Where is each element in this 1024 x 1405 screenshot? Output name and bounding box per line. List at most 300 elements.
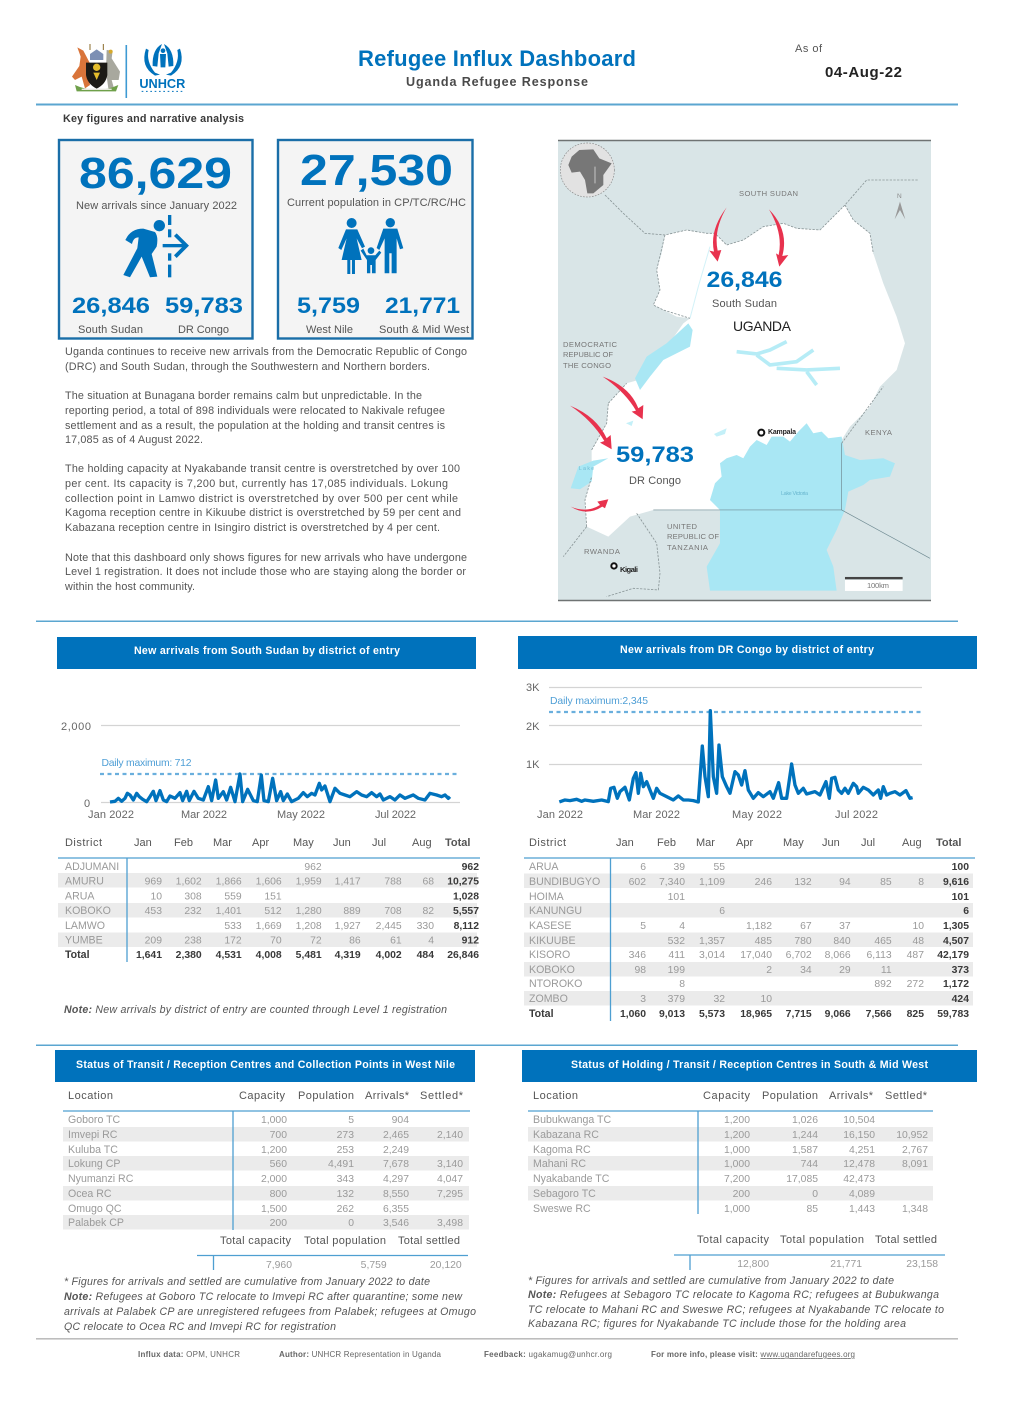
row: Hoima: 101: [668, 892, 685, 903]
row: Arua: 559: [224, 892, 242, 902]
row: Nyumanzi RC: Nyumanzi RC: [68, 1173, 134, 1185]
y axis labels: 3K: [526, 682, 540, 694]
row: Amuru: AMURU: [65, 876, 104, 888]
note: West Nile: [64, 1276, 476, 1333]
logo divider: [126, 45, 127, 98]
row: Kikuube: 532: [668, 936, 685, 947]
row: Lokung CP: 3,140: [437, 1159, 463, 1170]
row: Yumbe: 70: [270, 936, 282, 946]
y axis labels: 1K: [526, 759, 540, 771]
map label: Congo country: REPUBLIC OF: [563, 350, 613, 359]
row: Arua: [65, 890, 479, 902]
narrative text: Note that this dashboard only shows figures for new arrivals who have undergone: [65, 552, 467, 564]
row: Lamwo: LAMWO: [65, 920, 105, 932]
row: Sweswe RC: 1,348: [902, 1204, 928, 1215]
row: Kikuube: 48: [912, 936, 924, 947]
table: South Sudan arrivals by district: [58, 837, 480, 962]
row: Bundibugyo: 94: [839, 877, 851, 888]
as of label: As of: [795, 43, 823, 55]
table header: Arrivals*: [829, 1090, 874, 1102]
table header: Capacity: [239, 1090, 286, 1102]
row: Hoima: 101: [952, 892, 969, 903]
map label: north: N: [897, 193, 902, 200]
map label: Congo country: [563, 340, 618, 370]
row: Adjumani: [65, 861, 479, 873]
line chart: South Sudan daily arrivals: [61, 721, 460, 821]
row: total: 1,060: [620, 1009, 646, 1020]
map label: South Sudan country: SOUTH SUDAN: [739, 189, 798, 198]
row: Koboko: 11: [881, 965, 892, 976]
map label: Tanzania: REPUBLIC OF: [667, 532, 719, 541]
panel heading: DR Congo arrivals: [518, 636, 977, 669]
data line: [559, 711, 913, 802]
map: Uganda land area: [585, 205, 905, 537]
row: Koboko: 373: [952, 965, 969, 976]
row: Kabazana RC: 1,244: [792, 1130, 818, 1141]
table header: [529, 837, 961, 849]
row: Arua: 39: [673, 862, 685, 873]
row: Arua: [529, 861, 969, 873]
narrative text: The situation at Bunagana border remains calm but unpredictable. In the: [65, 390, 422, 402]
row: Imvepi RC: 2,465: [383, 1130, 409, 1141]
row: total: 4,319: [335, 950, 361, 961]
row: Koboko: 199: [668, 965, 685, 976]
row: Nyakabande TC: Nyakabande TC: [533, 1173, 610, 1185]
row: total: 4,531: [216, 950, 242, 961]
note: South and Mid West: TC relocate to Mahani RC and Sweswe RC; refugees at Nyakabande TC relocate to: [528, 1304, 944, 1316]
row: Palabek CP: [68, 1217, 463, 1229]
totals: West Nile: 7,960: [266, 1260, 292, 1271]
row: Sebagoro TC: 0: [812, 1189, 818, 1200]
row: Zombo: [529, 993, 969, 1005]
row: Sebagoro TC: 200: [733, 1189, 750, 1200]
totals: South and Mid West: [674, 1234, 945, 1270]
panel heading: West Nile centres: [55, 1050, 475, 1082]
row: Yumbe: YUMBE: [65, 934, 103, 946]
row: Kabazana RC: [533, 1129, 928, 1141]
row: Lamwo: [65, 920, 479, 932]
map label: Kampala: Kampala: [768, 429, 796, 436]
row: Kisoro: KISORO: [529, 949, 570, 961]
row: Yumbe: [65, 934, 479, 946]
note: South Sudan table: Note: New arrivals by district of entry are counted through Level 1 registration: [64, 1004, 447, 1016]
narrative text: collection point in Lamwo district is overstretched by over 500 per cent while: [65, 493, 458, 505]
row: Nyumanzi RC: 2,000: [261, 1174, 287, 1185]
narrative text: within the host community.: [64, 581, 195, 593]
row: Kisoro: 6,702: [786, 950, 812, 961]
row: Kikuube: 465: [874, 936, 892, 947]
date: 04-Aug-22: [825, 64, 902, 81]
table header: [65, 837, 470, 849]
totals: South and Mid West: Total settled: [875, 1234, 937, 1246]
row: Amuru: 10,275: [447, 876, 479, 888]
figure: DR Congo: 59,783: [165, 293, 243, 318]
totals: South and Mid West: 21,771: [830, 1259, 862, 1270]
table header: May: [293, 837, 314, 849]
footer: [138, 1350, 855, 1359]
y axis labels: 2,000: [61, 721, 91, 733]
row: Sebagoro TC: 4,089: [849, 1189, 875, 1200]
table header: Population: [762, 1090, 818, 1102]
narrative text: Kagoma reception centre in Kikuube district is overstretched by 59 per cent and: [65, 507, 461, 519]
row: Koboko: KOBOKO: [529, 964, 575, 976]
row: total: 59,783: [937, 1009, 969, 1020]
row: Mahani RC: 744: [801, 1159, 818, 1170]
row: Kasese: 10: [912, 921, 924, 932]
panel heading: South Sudan arrivals: New arrivals from South Sudan by district of entry: [134, 645, 400, 657]
row: Amuru: 68: [422, 876, 434, 888]
panel heading: West Nile centres: Status of Transit / Reception Centres and Collection Points in West Nile: [76, 1059, 455, 1071]
row: Mahani RC: 8,091: [902, 1159, 928, 1170]
row: Koboko: 232: [184, 906, 202, 917]
x axis labels: May 2022: [277, 809, 325, 821]
row: Ntoroko: [529, 978, 969, 990]
totals: South and Mid West: 12,800: [737, 1259, 769, 1270]
label: South Sudan: South Sudan: [78, 324, 143, 336]
panel heading: DR Congo arrivals: New arrivals from DR Congo by district of entry: [620, 644, 874, 656]
row: Lokung CP: 560: [270, 1159, 287, 1170]
row: Mahani RC: 12,478: [843, 1159, 875, 1170]
row: Mahani RC: Mahani RC: [533, 1158, 586, 1170]
row: Lamwo: 1,927: [335, 921, 361, 932]
map: globe inset: [560, 143, 614, 197]
row: Kasese: [529, 920, 969, 932]
row: Kikuube: 4,507: [943, 936, 969, 947]
totals: West Nile: 20,120: [430, 1260, 462, 1271]
map label: Tanzania: UNITED: [667, 522, 698, 531]
row: Yumbe: 172: [224, 936, 242, 946]
row: Lokung CP: Lokung CP: [68, 1158, 120, 1170]
row: Goboro TC: 904: [392, 1115, 409, 1126]
table header: Total: [936, 837, 961, 849]
row: Amuru: 1,959: [296, 876, 322, 888]
row: Amuru: 788: [384, 876, 402, 888]
table header: Population: [298, 1090, 354, 1102]
row: Kagoma RC: 1,587: [792, 1145, 818, 1156]
row: Yumbe: 209: [145, 936, 162, 946]
row: Zombo: 379: [668, 994, 685, 1005]
row: Ocea RC: [68, 1188, 463, 1200]
row: Nyumanzi RC: 4,047: [437, 1174, 463, 1185]
row: Kanungu: [529, 905, 969, 917]
row: Koboko: [65, 905, 479, 917]
row: Ntoroko: 1,172: [943, 979, 969, 990]
big figure: current population: 27,530: [300, 147, 453, 195]
row: Yumbe: 4: [428, 936, 434, 946]
row: Nyakabande TC: 7,200: [724, 1174, 750, 1185]
x axis labels: Mar 2022: [181, 809, 227, 821]
logo: UNHCR emblem: UNHCR: [139, 76, 186, 91]
row: Omugo QC: Omugo QC: [68, 1203, 122, 1215]
note: West Nile: QC relocate to Ocea RC and Imvepi RC for registration: [64, 1321, 336, 1333]
row: Kisoro: 3,014: [699, 950, 725, 961]
row: Kanungu: 6: [719, 906, 725, 917]
row: Koboko: 453: [145, 906, 162, 917]
row: Kuluba TC: Kuluba TC: [68, 1144, 118, 1156]
row: Imvepi RC: 700: [270, 1130, 287, 1141]
row: Yumbe: 912: [462, 936, 479, 946]
row: total: 825: [907, 1009, 924, 1020]
table header: District: [529, 837, 566, 849]
row: Omugo QC: 1,500: [261, 1204, 287, 1215]
title: Refugee Influx Dashboard: [358, 46, 636, 71]
totals: West Nile: [197, 1235, 468, 1271]
panel heading: South and Mid West centres: Status of Holding / Transit / Reception Centres in South & Mid West: [571, 1059, 928, 1071]
map label: Tanzania: [667, 522, 719, 552]
row: Kasese: 1,182: [746, 921, 772, 932]
map figure: South Sudan: 26,846: [706, 267, 782, 292]
row: Sebagoro TC: [533, 1188, 875, 1200]
map: Lake Albert: [635, 323, 693, 390]
row: Hoima: [529, 891, 969, 903]
row: Mahani RC: [533, 1158, 928, 1170]
row: Arua: 1,028: [453, 892, 479, 902]
logo: UNHCR emblem: [139, 44, 186, 91]
row: Goboro TC: [68, 1114, 409, 1126]
x axis labels: [537, 809, 878, 821]
row: Ocea RC: 7,295: [437, 1189, 463, 1200]
table header: Aug: [902, 837, 922, 849]
note: South and Mid West: [528, 1275, 944, 1330]
x axis labels: Jan 2022: [537, 809, 583, 821]
row: Palabek CP: Palabek CP: [68, 1217, 124, 1229]
table header: Total: [445, 837, 470, 849]
daily maximum label: Daily maximum: 712: [102, 758, 192, 769]
note: West Nile: arrivals at Palabek CP are unregistered refugees from Palabek; refugees at Omugo: [64, 1306, 476, 1318]
map caption: South Sudan: South Sudan: [712, 298, 777, 310]
logo: Uganda coat of arms: [72, 44, 120, 91]
row: Koboko: 708: [384, 906, 402, 917]
row: Nyakabande TC: [533, 1173, 875, 1185]
map label: Rwanda: RWANDA: [584, 547, 621, 556]
row: total: 5,573: [699, 1009, 725, 1020]
row: Bubukwanga TC: Bubukwanga TC: [533, 1114, 611, 1126]
footer: author: Author: UNHCR Representation in Uganda: [279, 1350, 442, 1359]
note: South and Mid West: Note: Refugees at Sebagoro TC relocate to Kagoma RC; refugees at Bubukwanga: [528, 1289, 939, 1301]
footer: website: For more info, please visit: www.ugandarefugees.org: [651, 1350, 855, 1359]
subtitle: Uganda Refugee Response: [406, 75, 588, 89]
row: Zombo: 424: [952, 994, 969, 1005]
label: West Nile: West Nile: [306, 324, 353, 336]
totals: West Nile: 5,759: [361, 1260, 387, 1271]
table header: Mar: [213, 837, 232, 849]
totals: South and Mid West: 23,158: [906, 1259, 938, 1270]
row: total: 4,008: [256, 950, 282, 961]
map: Kigali marker: [611, 563, 617, 569]
icon: family: [338, 218, 403, 274]
row: Sebagoro TC: Sebagoro TC: [533, 1188, 596, 1200]
row: total: 9,066: [825, 1009, 851, 1020]
table header: Apr: [252, 837, 269, 849]
table header: [533, 1090, 928, 1102]
map label: Kenya: KENYA: [865, 428, 893, 437]
row: Lamwo: 533: [224, 921, 242, 932]
row: Ocea RC: 132: [337, 1189, 354, 1200]
footer: feedback: Feedback: ugakamug@unhcr.org: [484, 1350, 612, 1359]
row: Sweswe RC: Sweswe RC: [533, 1203, 591, 1215]
row: Bubukwanga TC: 1,200: [724, 1115, 750, 1126]
row: Nyakabande TC: 17,085: [786, 1174, 818, 1185]
data line: [110, 774, 450, 802]
narrative text: (DRC) and South Sudan, through the Southwestern and Northern borders.: [65, 361, 430, 373]
row: Amuru: 1,606: [256, 876, 282, 888]
row: total: Total: [65, 949, 90, 961]
row: Lamwo: 1,669: [256, 921, 282, 932]
row: Arua: 100: [952, 862, 969, 873]
row: Kikuube: [529, 935, 969, 947]
row: Koboko: 5,557: [453, 906, 479, 917]
row: Lamwo: 2,445: [376, 921, 402, 932]
row: Yumbe: 86: [349, 936, 361, 946]
map: small lakes: [626, 421, 727, 437]
table: DR Congo arrivals by district: [524, 837, 975, 1021]
row: Kasese: 67: [800, 921, 812, 932]
map figure: DR Congo: 59,783: [616, 442, 694, 467]
table header: Aug: [412, 837, 432, 849]
table header: Jul: [861, 837, 875, 849]
row: Arua: ARUA: [529, 861, 559, 873]
row: Sweswe RC: 85: [806, 1204, 818, 1215]
map: north arrow: [895, 202, 905, 219]
row: Kisoro: 8,066: [825, 950, 851, 961]
row: Amuru: 969: [145, 876, 162, 888]
row: Kuluba TC: 1,200: [261, 1145, 287, 1156]
narrative text: [64, 346, 467, 593]
row: Kasese: 37: [839, 921, 851, 932]
y axis labels: [61, 721, 91, 810]
table header: Location: [68, 1090, 113, 1102]
section heading: key figures: Key figures and narrative analysis: [63, 113, 244, 125]
row: Kabazana RC: 16,150: [843, 1130, 875, 1141]
row: Kisoro: 6,113: [866, 950, 892, 961]
table header: District: [65, 837, 102, 849]
big figure: new arrivals: 86,629: [79, 150, 232, 198]
row: total: 9,013: [659, 1009, 685, 1020]
row: Kagoma RC: [533, 1144, 928, 1156]
totals: West Nile: Total settled: [398, 1235, 460, 1247]
narrative text: 17,085 as of 4 August 2022.: [65, 434, 203, 446]
daily maximum label: Daily maximum:2,345: [550, 696, 648, 707]
row: Yumbe: 72: [310, 936, 322, 946]
icon: person crossing border: [123, 215, 189, 277]
table header: Jun: [822, 837, 840, 849]
totals: South and Mid West: Total capacity: [697, 1234, 770, 1246]
row: Kasese: 1,305: [943, 921, 969, 932]
row: Omugo QC: 6,355: [383, 1204, 409, 1215]
panel: new arrivals: [59, 140, 252, 338]
map caption: DR Congo: DR Congo: [629, 475, 681, 487]
table header: Jan: [134, 837, 152, 849]
figure: South and Mid West: 21,771: [385, 293, 460, 318]
row: total: [65, 949, 479, 961]
row: Amuru: 1,417: [335, 876, 361, 888]
table header: Settled*: [420, 1090, 464, 1102]
row: Adjumani: 962: [304, 862, 322, 873]
row: Kasese: 5: [640, 921, 646, 932]
row: Lokung CP: 7,678: [383, 1159, 409, 1170]
row: Arua: 6: [640, 862, 646, 873]
row: Kanungu: KANUNGU: [529, 905, 582, 917]
figure: South Sudan: 26,846: [72, 293, 150, 318]
x axis labels: Mar 2022: [633, 809, 680, 821]
map: scale bar: [845, 577, 903, 591]
y axis labels: 0: [84, 798, 90, 810]
map: Lake Edward: [571, 458, 608, 489]
map frame lines: [558, 140, 931, 600]
row: Nyumanzi RC: 343: [337, 1174, 354, 1185]
label: DR Congo: DR Congo: [178, 324, 229, 336]
row: Kasese: KASESE: [529, 920, 571, 932]
row: Kanungu: 6: [963, 906, 969, 917]
row: Koboko: [529, 964, 969, 976]
row: total: 7,715: [786, 1009, 812, 1020]
row: Koboko: KOBOKO: [65, 905, 111, 917]
table header: Settled*: [885, 1090, 928, 1102]
daily maximum line: [100, 773, 460, 775]
row: Kisoro: 346: [629, 950, 646, 961]
table header: Jan: [616, 837, 634, 849]
footer: data source: Influx data: OPM, UNHCR: [138, 1350, 240, 1359]
panel heading: South and Mid West centres: [522, 1050, 977, 1082]
row: Kisoro: 411: [668, 950, 685, 961]
row: Goboro TC: 5: [348, 1115, 354, 1126]
row: Kisoro: [529, 949, 969, 961]
map label: Kigali: Kigali: [620, 565, 638, 574]
row: Ntoroko: 892: [874, 979, 892, 990]
row: Ntoroko: 8: [679, 979, 685, 990]
map: Kampala marker: [758, 430, 764, 436]
row: Kagoma RC: Kagoma RC: [533, 1144, 591, 1156]
row: Kisoro: 17,040: [740, 950, 772, 961]
row: Arua: 308: [184, 892, 202, 902]
table: West Nile centres: [63, 1090, 470, 1230]
row: Koboko: 1,401: [216, 906, 242, 917]
header: [72, 43, 902, 98]
row: Ntoroko: NTOROKO: [529, 978, 582, 990]
row: Imvepi RC: 273: [337, 1130, 354, 1141]
row: Kabazana RC: Kabazana RC: [533, 1129, 599, 1141]
row: Bundibugyo: 602: [629, 877, 646, 888]
row: Palabek CP: 0: [348, 1218, 354, 1229]
row: Ntoroko: 272: [907, 979, 924, 990]
narrative text: settlement and as a result, the population at the holding and transit centres is: [65, 420, 446, 432]
x axis labels: Jul 2022: [835, 809, 878, 821]
row: Omugo QC: [68, 1203, 409, 1215]
map label: Tanzania: TANZANIA: [667, 543, 709, 552]
map: Nile river: [690, 247, 710, 318]
x axis labels: May 2022: [732, 809, 782, 821]
panel: current population: [278, 140, 472, 338]
row: Zombo: 3: [640, 994, 646, 1005]
row: Bubukwanga TC: 10,504: [843, 1115, 875, 1126]
map label: Congo country: THE CONGO: [563, 361, 611, 370]
row: Adjumani: ADJUMANI: [65, 861, 119, 873]
row: Koboko: 82: [422, 906, 434, 917]
row: Imvepi RC: Imvepi RC: [68, 1129, 118, 1141]
row: Goboro TC: 1,000: [261, 1115, 287, 1126]
x axis labels: Jan 2022: [88, 809, 134, 821]
row: Bundibugyo: 9,616: [943, 877, 969, 888]
row: Nyakabande TC: 42,473: [843, 1174, 875, 1185]
note: West Nile: * Figures for arrivals and settled are cumulative from January 2022 to date: [64, 1276, 430, 1288]
row: Koboko: 1,280: [296, 906, 322, 917]
row: Nyumanzi RC: [68, 1173, 463, 1185]
row: Kuluba TC: 253: [337, 1145, 354, 1156]
row: Nyumanzi RC: 4,297: [383, 1174, 409, 1185]
row: Ocea RC: 8,550: [383, 1189, 409, 1200]
map: Lake Kyoga: [737, 342, 840, 385]
row: Amuru: 1,866: [216, 876, 242, 888]
